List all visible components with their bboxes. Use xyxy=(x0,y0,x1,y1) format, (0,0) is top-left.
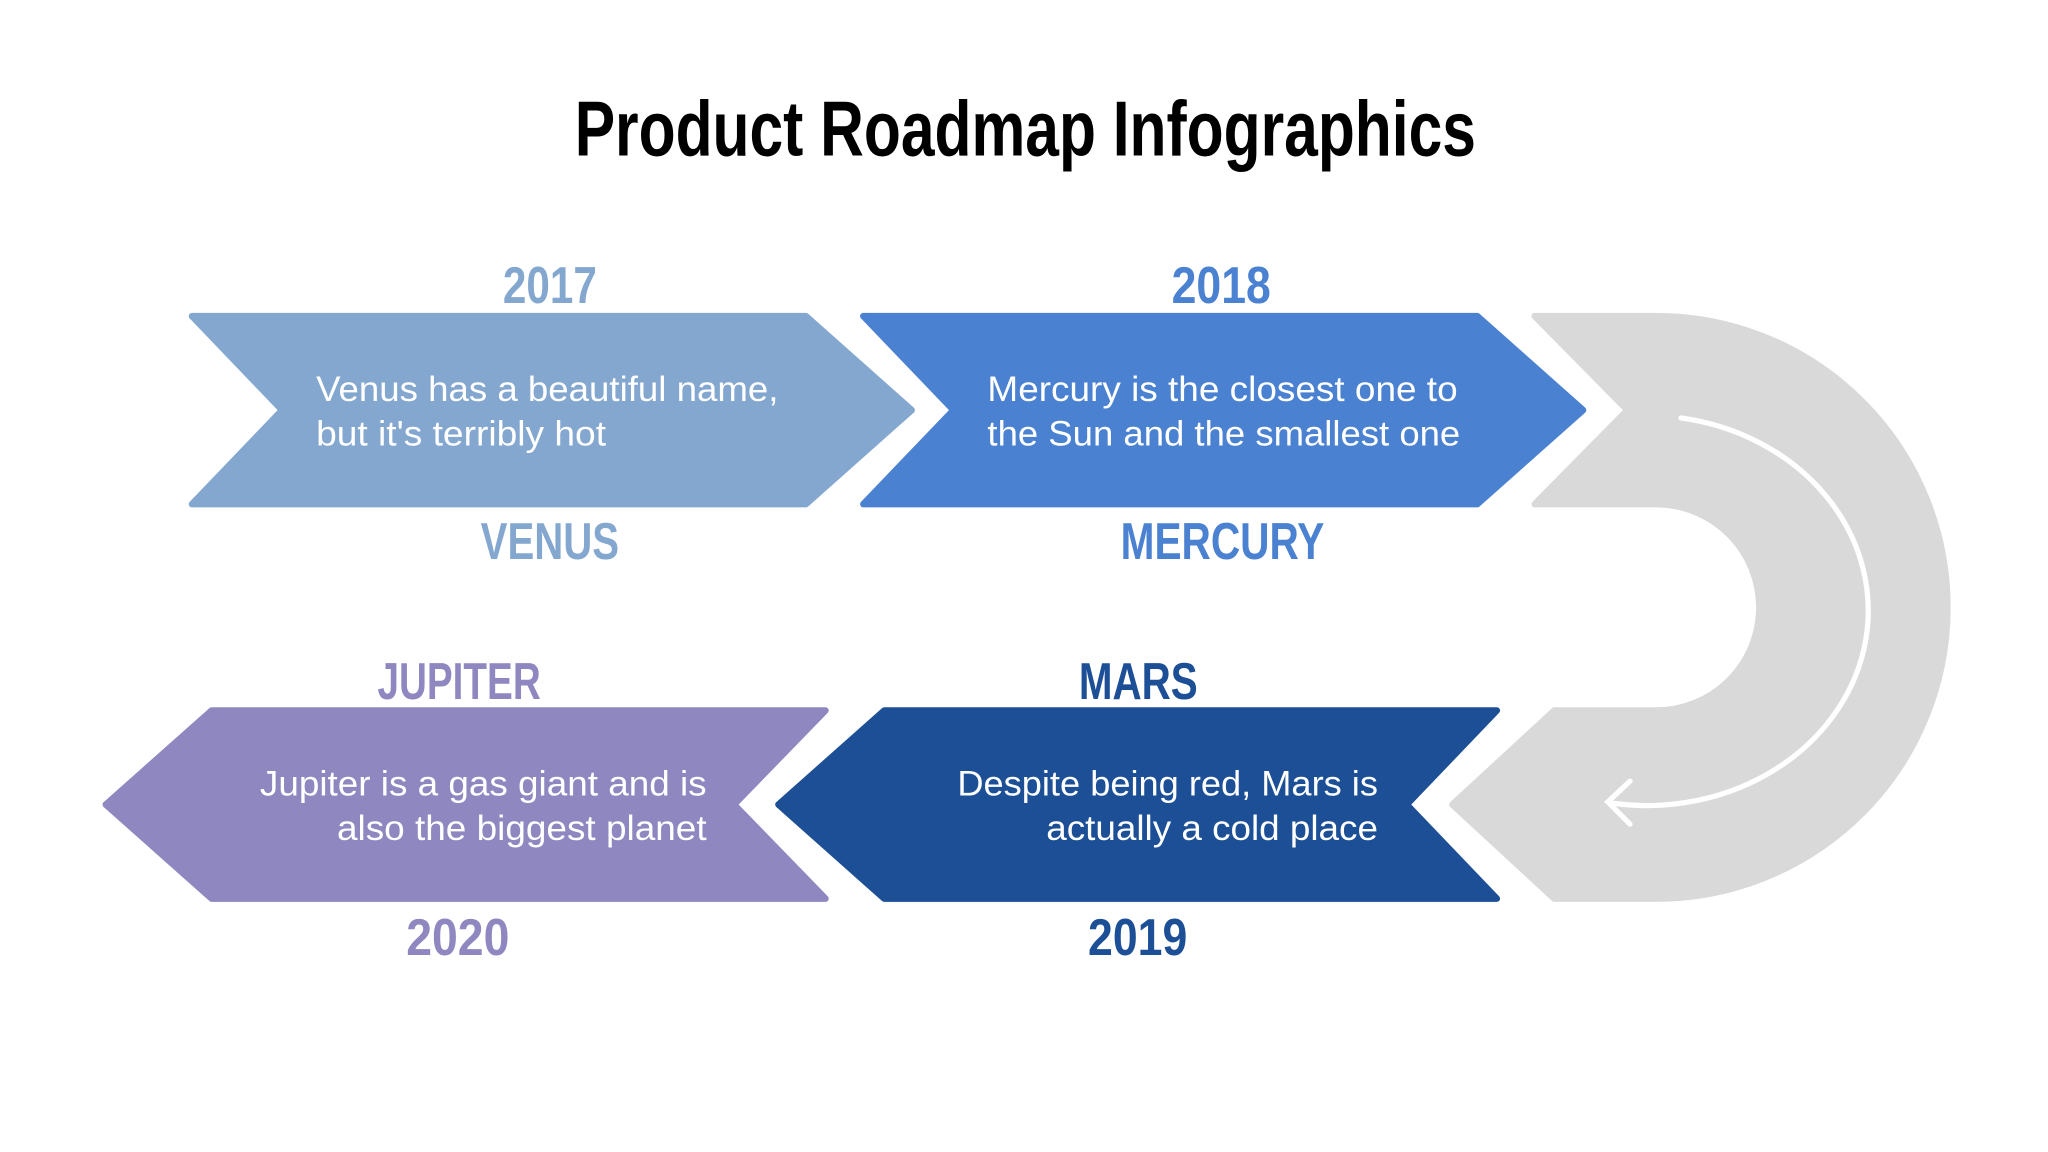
panel: jupiter: Jupiter is a gas giant and is xyxy=(260,764,707,803)
year 2018: 2018 xyxy=(1172,257,1271,315)
panel: jupiter xyxy=(106,711,825,899)
panel: venus: Venus has a beautiful name, xyxy=(316,370,778,409)
title: Product Roadmap Infographics xyxy=(575,84,1476,172)
panel: mars xyxy=(778,711,1497,899)
year 2017: 2017 xyxy=(503,257,597,315)
label venus: VENUS xyxy=(481,513,619,571)
panel: venus: but it's terribly hot xyxy=(316,414,606,453)
panel: mercury: the Sun and the smallest one xyxy=(987,414,1460,453)
icon: return arrow line xyxy=(1608,418,1868,824)
year 2019: 2019 xyxy=(1088,909,1187,967)
label jupiter: JUPITER xyxy=(377,653,541,711)
label mercury: MERCURY xyxy=(1121,513,1324,571)
year 2020: 2020 xyxy=(406,909,509,967)
panel: venus xyxy=(192,316,912,504)
label mars: MARS xyxy=(1079,653,1198,711)
panel: jupiter: also the biggest planet xyxy=(337,809,707,848)
panel: mars: actually a cold place xyxy=(1046,809,1378,848)
gray return arrow xyxy=(1452,316,1947,899)
panel: mercury xyxy=(863,316,1583,504)
panel: mercury: Mercury is the closest one to xyxy=(987,370,1458,409)
panel: mars: Despite being red, Mars is xyxy=(957,764,1378,803)
